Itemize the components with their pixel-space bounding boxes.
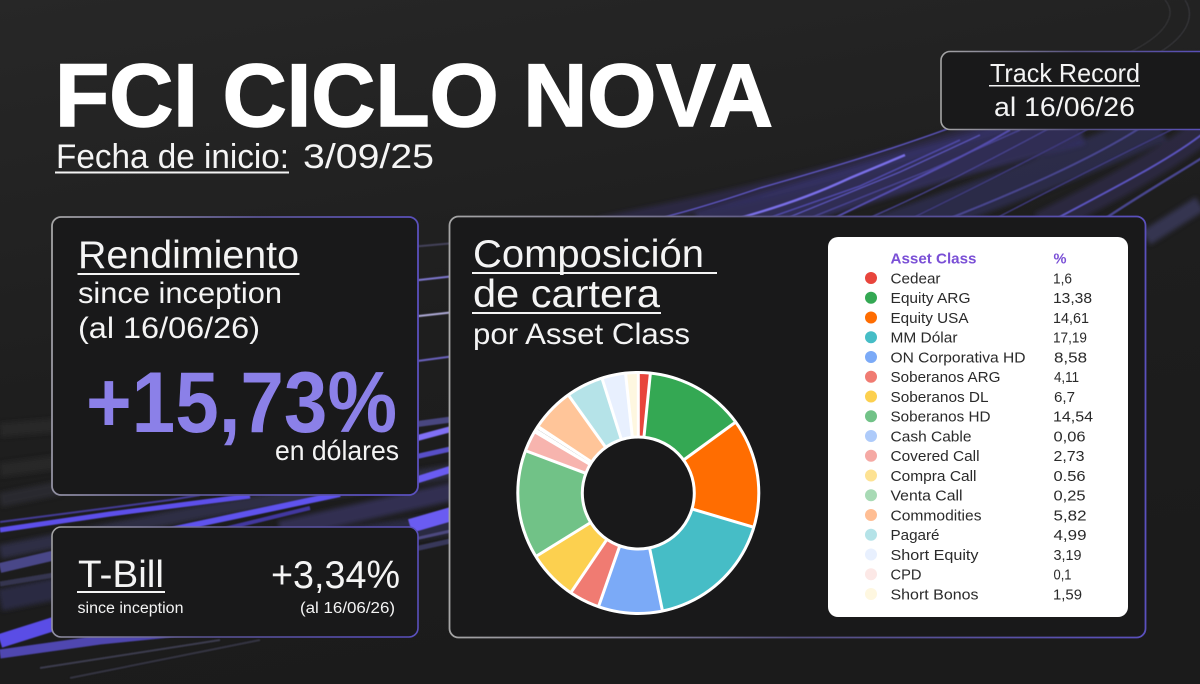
text: por asset class: por Asset Class [473, 318, 690, 351]
title: FCI CICLO NOVA [55, 45, 773, 145]
row: cpd: CPD [890, 567, 922, 584]
heading: composicion: de cartera [473, 273, 660, 316]
row: pagare: 4,99 [1054, 527, 1086, 544]
panel: composicion de cartera [450, 216, 1146, 638]
table header [890, 250, 1066, 268]
row: short equity: 3,19 [1054, 547, 1082, 564]
row: short equity [865, 547, 1082, 564]
row: cpd [865, 567, 1072, 584]
heading: composicion [472, 233, 717, 316]
row: soberanos arg: Soberanos ARG [890, 369, 1000, 386]
text: en dolares: en dólares [275, 435, 399, 466]
text: since inception: since inception [78, 277, 282, 310]
subtitle: fecha de inicio: Fecha de inicio: [56, 138, 289, 176]
row: short bonos [865, 586, 1082, 603]
row: on corporativa hd [865, 349, 1087, 366]
heading: rendimiento: Rendimiento [78, 234, 299, 277]
row: mm dolar [865, 330, 1087, 347]
badge: track record [941, 52, 1200, 130]
row: equity arg: 13,38 [1053, 290, 1092, 307]
donut chart [518, 372, 759, 614]
row: cedear: Cedear [890, 270, 940, 287]
row: pagare: Pagaré [890, 527, 940, 544]
text: date: (al 16/06/26) [78, 312, 260, 345]
table header: Asset Class [890, 250, 976, 268]
subtitle: fecha de inicio: 3/09/25 [303, 138, 434, 176]
text: since inception small: since inception [78, 600, 184, 617]
row: pagare [865, 527, 1086, 544]
heading: t-bill: T-Bill [78, 554, 164, 596]
row: compra call: Compra Call [890, 468, 976, 485]
row: cash cable: Cash Cable [890, 428, 972, 445]
row: cash cable [865, 428, 1086, 445]
row: soberanos hd: 14,54 [1053, 409, 1093, 426]
row: short equity: Short Equity [890, 547, 979, 564]
row: covered call: Covered Call [890, 448, 980, 465]
row: venta call [865, 488, 1086, 505]
panel: t-bill [52, 527, 418, 637]
badge: track record: al 16/06/26 [994, 92, 1135, 122]
row: commodities: Commodities [890, 507, 982, 524]
panel: rendimiento [52, 217, 418, 495]
row: soberanos hd: Soberanos HD [890, 409, 991, 426]
row: cash cable: 0,06 [1054, 428, 1086, 445]
row: compra call [865, 468, 1086, 485]
big number: +15,73% [86, 355, 397, 451]
row: soberanos dl: 6,7 [1054, 389, 1075, 406]
row: soberanos arg [865, 369, 1079, 386]
row: compra call: 0.56 [1054, 468, 1086, 485]
t-bill value: +3,34% [271, 554, 400, 597]
row: commodities: 5,82 [1054, 507, 1086, 524]
legend table card [828, 237, 1128, 617]
badge: track record: Track Record [990, 58, 1140, 88]
table header: % [1054, 250, 1066, 268]
row: venta call: 0,25 [1054, 488, 1086, 505]
row: soberanos dl [865, 389, 1075, 406]
row: equity arg: Equity ARG [890, 290, 970, 307]
row: cpd: 0,1 [1054, 567, 1072, 584]
row: venta call: Venta Call [890, 488, 962, 505]
row: covered call: 2,73 [1054, 448, 1084, 465]
row: equity usa: 14,61 [1053, 310, 1089, 327]
row: cedear: 1,6 [1053, 270, 1072, 287]
row: soberanos arg: 4,11 [1054, 369, 1079, 386]
t-bill date: (al 16/06/26) [300, 600, 395, 617]
row: equity usa [865, 310, 1089, 327]
subtitle: fecha de inicio [55, 138, 434, 176]
heading: composicion: Composición [473, 233, 704, 276]
row: equity arg [865, 290, 1092, 307]
row: short bonos: 1,59 [1053, 586, 1082, 603]
row: on corporativa hd: 8,58 [1054, 349, 1087, 366]
row: equity usa: Equity USA [890, 310, 969, 327]
row: soberanos dl: Soberanos DL [890, 389, 988, 406]
row: on corporativa hd: ON Corporativa HD [890, 349, 1026, 366]
row: mm dolar: MM Dólar [890, 330, 958, 347]
row: short bonos: Short Bonos [890, 586, 979, 603]
row: commodities [865, 507, 1086, 524]
row: mm dolar: 17,19 [1053, 330, 1087, 347]
row: covered call [865, 448, 1084, 465]
row: soberanos hd [865, 409, 1093, 426]
row: cedear [865, 270, 1072, 287]
